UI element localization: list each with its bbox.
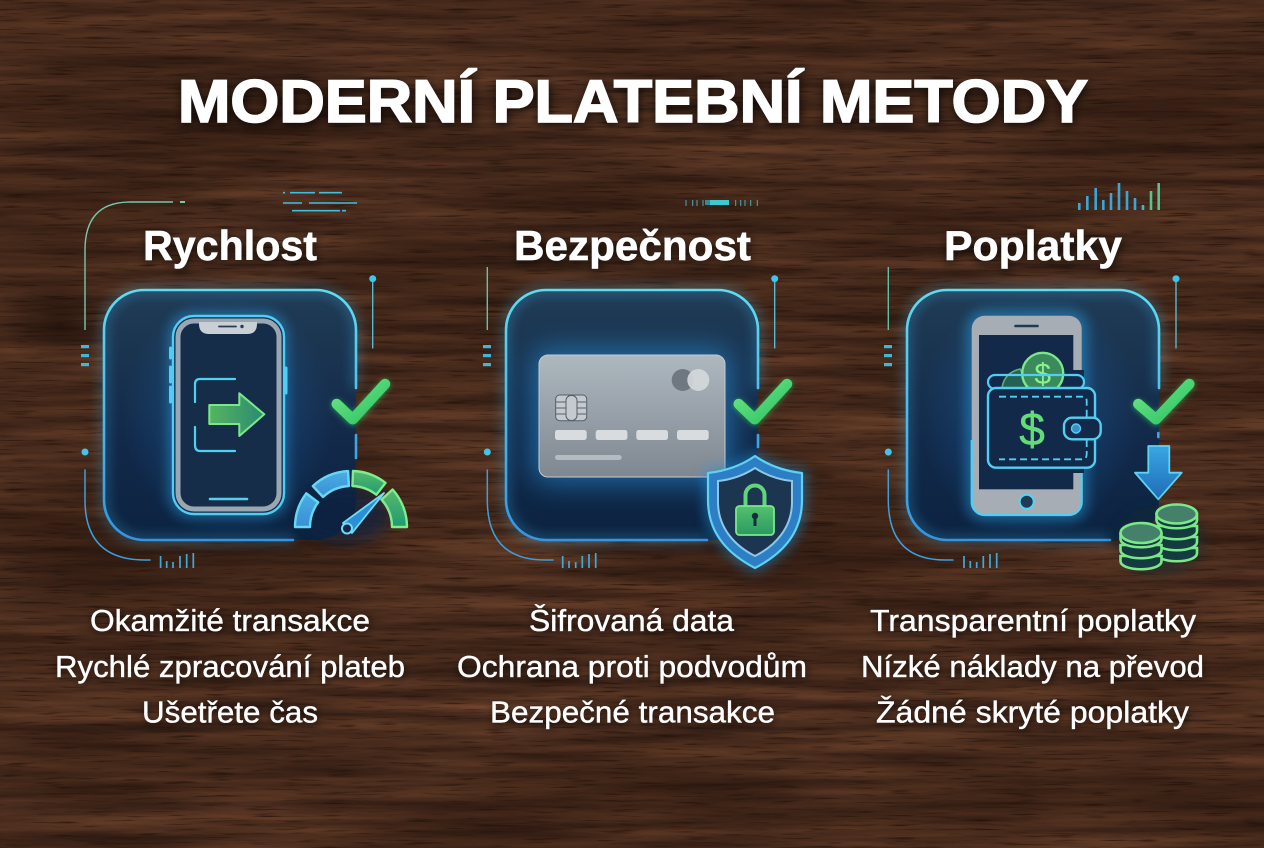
- icon: smartphone with wallet: $: [1019, 403, 1045, 455]
- text block: Rychlost benefits: Rychlé zpracování plateb: [55, 649, 405, 684]
- icon: checkmark: [337, 384, 385, 419]
- decorative circuit lines: Poplatky: [884, 183, 1180, 568]
- left coin stack: [1120, 523, 1162, 569]
- column: Bezpečnost: [457, 200, 807, 730]
- text block: Bezpečnost benefits: Ochrana proti podvodům: [457, 649, 807, 684]
- right coin stack: [1156, 504, 1197, 561]
- icon: smartphone with wallet: [966, 310, 1101, 521]
- icon: checkmark: [739, 384, 787, 419]
- text block: Bezpečnost benefits: Šifrovaná data: [529, 603, 735, 638]
- text block: Poplatky benefits: Transparentní poplatky: [870, 603, 1197, 638]
- text block: Poplatky benefits: [861, 603, 1204, 730]
- icon: smartphone with arrow: [168, 312, 288, 518]
- icon: security shield with padlock: [708, 456, 802, 568]
- decorative circuit lines: Rychlost: [81, 193, 376, 568]
- icon: checkmark: [1138, 384, 1189, 419]
- icon: smartphone with wallet: $: [1034, 358, 1051, 391]
- text block: Poplatky benefits: Nízké náklady na převod: [861, 649, 1204, 684]
- text block: Poplatky benefits: Žádné skryté poplatky: [876, 694, 1190, 730]
- decorative circuit lines: Bezpečnost: [483, 200, 778, 568]
- text block: Bezpečnost benefits: Bezpečné transakce: [490, 694, 775, 730]
- column: Poplatky: [861, 183, 1204, 730]
- icon: down arrow: [1135, 446, 1182, 499]
- mini bar chart: [1079, 183, 1159, 210]
- panel: Poplatky: [907, 290, 1159, 540]
- heading: Bezpečnost: Bezpečnost: [514, 222, 751, 269]
- icon: payment card: [533, 349, 731, 483]
- icon: coin stacks: [1116, 504, 1204, 574]
- panel: Rychlost: [104, 290, 356, 540]
- text block: Rychlost benefits: Ušetřete čas: [142, 694, 318, 730]
- icon: speedometer gauge: [295, 471, 407, 543]
- card chip: [556, 395, 587, 421]
- heading: Rychlost: Rychlost: [143, 222, 317, 269]
- wallet body: [988, 388, 1095, 468]
- heading: Poplatky: Poplatky: [944, 222, 1123, 269]
- panel: Bezpečnost: [506, 290, 758, 540]
- text block: Rychlost benefits: [55, 603, 405, 730]
- column: Rychlost: [55, 193, 407, 729]
- title: MODERNÍ PLATEBNÍ METODY: [178, 68, 1088, 135]
- text block: Rychlost benefits: Okamžité transakce: [90, 603, 370, 638]
- text block: Bezpečnost benefits: [457, 603, 807, 730]
- wallet back and coins: [1002, 369, 1030, 388]
